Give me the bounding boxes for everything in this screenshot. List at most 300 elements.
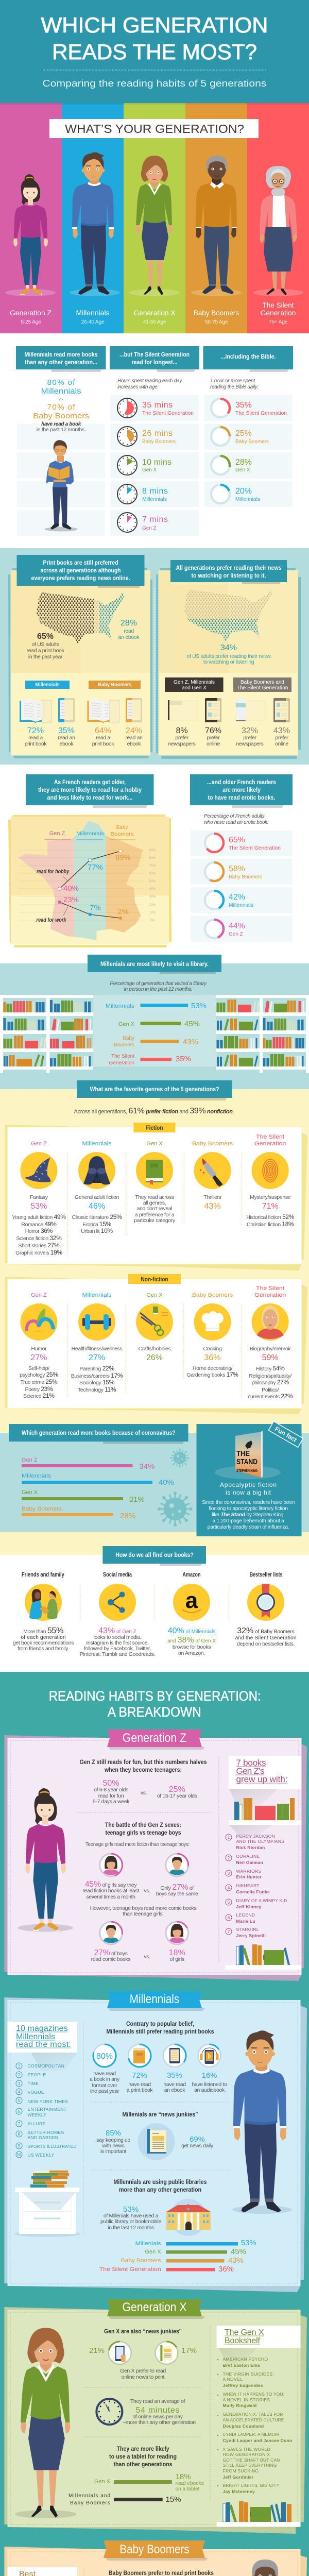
list: Gen Z books: Rick Riordan [236, 1845, 265, 1850]
text: battle of the sexes: The battle of the Gen Z sexes: [105, 1821, 181, 1828]
icon: print book 64 percent [88, 699, 119, 723]
label: Generation Z: 5-25 Age [21, 319, 41, 325]
label: Millennials tag: Millennials [35, 682, 60, 688]
heading: what's your generation [49, 119, 259, 138]
text: how books are found: More than 55% [23, 1626, 63, 1635]
text: how books are found: from friends and family. [18, 1646, 69, 1652]
bar chart: library visits [106, 1002, 207, 1066]
panel: five generation columns [0, 103, 309, 333]
ring: 28 percent: 28% [235, 458, 252, 467]
icon: bestseller badge [247, 1584, 284, 1621]
heading: print books preferred: across all generations although [40, 567, 121, 574]
list: Gen Z books: 4 [228, 1886, 230, 1890]
label: Generation X: 41-55 Age [143, 319, 166, 325]
ring: 28 percent [211, 456, 252, 474]
list: magazines: 8 [18, 2132, 21, 2137]
card: 10 magazines: Millennials [16, 2032, 55, 2041]
text: fiction stats: several times a month [86, 1894, 135, 1900]
list: magazines: 3 [18, 2081, 21, 2086]
label: Millennials tag [25, 681, 70, 689]
list: Gen X books: Jeffrey Eugenides [222, 2383, 263, 2388]
text: fiction stats: than teenage girls: [123, 1911, 164, 1917]
callout: fun fact apocalyptic fiction: Since the coronavirus, readers have been [202, 1499, 295, 1505]
panel: who reads most headers: ...but The Silent Generation [119, 351, 190, 358]
label: Millennials: Millennials [76, 309, 109, 317]
bar chart: coronavirus reading [22, 1457, 174, 1520]
text: tablet reading: than other generations [113, 2461, 173, 2468]
bar chart: tablet readers [68, 2472, 204, 2506]
label: The Silent Generation: Generation [261, 309, 296, 317]
card: 7 books Gen Z grew up with [229, 1756, 302, 1839]
label: Baby Boomers [194, 309, 239, 325]
icon: dark helmet [78, 1152, 115, 1189]
icon: book row on shelf [225, 1944, 302, 1970]
ring: 28 percent: Gen X [235, 467, 250, 473]
list: Gen X books: GENERATION X: TALES FOR [222, 2412, 283, 2417]
text: non-fiction genre stats: Humor [31, 1346, 47, 1352]
ring: 20 percent: 20% [235, 487, 252, 496]
text: public libraries: in the last 12 months [108, 2225, 154, 2231]
text: non-fiction genre stats: Religion/spirituality/ [249, 1373, 292, 1379]
list: magazines: AND GARDEN [28, 2135, 58, 2140]
chart: France map hobby and work lines: 77% [88, 863, 103, 872]
list: Gen X books: A NOVEL IN STORIES [222, 2397, 270, 2402]
icon: chef hat [194, 1303, 231, 1341]
text: non-fiction genre stats: Parenting 22% [79, 1365, 114, 1372]
text: non-fiction genre stats: 27% [30, 1353, 47, 1362]
text: how books are found [13, 1626, 297, 1657]
bar chart: public library use [99, 2239, 256, 2274]
bar chart: library visits: 35% [176, 1055, 191, 1063]
map: US adults prefer reading news [184, 589, 273, 642]
card: Gen X bookshelf: Bookshelf [225, 2336, 261, 2345]
text: fiction genre stats: Fantasy [30, 1194, 48, 1200]
bar chart: library visits: 43% [183, 1038, 198, 1046]
callout: fun fact apocalyptic fiction [197, 1421, 303, 1536]
text: non-fiction genre stats: Cooking [203, 1346, 222, 1352]
bar chart: public library use: The Silent Generation [99, 2266, 161, 2273]
card: 7 books Gen Z grew up with: grew up with: [236, 1774, 287, 1784]
stat row: book and news percentages: 32% [242, 726, 258, 735]
ring: 80 percent any format: format over [92, 2082, 117, 2089]
icon: Amazon logo [173, 1584, 210, 1621]
heading: French readers erotic books [190, 774, 293, 808]
panel: who reads most headers: than any other generation... [25, 359, 97, 366]
ring: 18 percent of girls read comics [166, 1922, 188, 1944]
card: 7 books Gen Z grew up with: Gen Z’s [236, 1766, 265, 1776]
list: Gen X books: FROM SUCKING [222, 2468, 259, 2473]
bar chart: coronavirus reading: 28% [120, 1512, 135, 1520]
ring: 16 percent audiobook [192, 2044, 227, 2093]
ribbon: Millennials [107, 1991, 205, 2011]
list: Gen X books: AN ACCELERATED CULTURE [222, 2417, 284, 2422]
bar chart: library visits: Generation [109, 1060, 134, 1066]
icon: ebook 35 percent [58, 698, 75, 722]
figure: large Millennial man [232, 2030, 292, 2214]
text: non-fiction genre stats: True crime 25% [20, 1378, 58, 1385]
panel: book reading comparison: 80% of [47, 378, 75, 387]
text: fiction stats: boys say the same [156, 1891, 198, 1897]
ring: 80 percent any format: have read [93, 2071, 116, 2077]
panel: coronavirus reading [0, 1424, 309, 1532]
ring: 16 percent audiobook: have listened to [192, 2081, 227, 2088]
panel: fiction genres: Gen Z [31, 1141, 47, 1147]
text: fiction genre stats: Historical fiction 52% [246, 1213, 295, 1221]
panel: print vs digital (open book spread) [0, 548, 309, 765]
list: Gen Z books: Marie Lu [236, 1919, 255, 1924]
chart: France map hobby and work lines: 2% [117, 907, 129, 916]
stat: 28 percent ebook: an ebook [118, 634, 140, 640]
clock: 10 mins: 10 mins [142, 458, 171, 467]
ring: 17 percent paper [155, 2342, 178, 2364]
text: public libraries: public library or bookmobile [100, 2218, 162, 2225]
icon: dumbbell [78, 1303, 115, 1341]
text: fiction genre stats: Science fiction 32% [16, 1234, 62, 1242]
text: non-fiction genre stats: 36% [204, 1353, 221, 1362]
list: Gen X books: Molly Ringwald [222, 2403, 257, 2408]
bar chart: tablet readers: 15% [166, 2495, 181, 2504]
stat row: book and news percentages: 35% [58, 726, 75, 735]
chart: France map hobby and work lines: Millennials [76, 831, 104, 837]
text: reading for fun halves [79, 1758, 207, 1805]
stat row: book and news percentages: print book [25, 741, 47, 747]
bar chart: library visits: 45% [184, 1020, 200, 1028]
chart: France map hobby and work lines [8, 815, 171, 947]
ring: 44 percent [205, 920, 245, 938]
chart: France map hobby and work lines: read for hobby [37, 869, 70, 875]
text: fiction genre stats: a preference for a [135, 1212, 175, 1218]
panel: Bible reading rings [204, 378, 293, 507]
list: Gen X books: BRIGHT LIGHTS, BIG CITY [222, 2483, 280, 2488]
text: fiction genre stats: 46% [89, 1202, 105, 1211]
panel: non-fiction genres [5, 1274, 307, 1414]
ribbon: Generation X: Generation X [123, 2300, 186, 2314]
ring: 35 percent: 35% [235, 401, 252, 410]
ring: 35 percent: The Silent Generation [235, 411, 287, 416]
clock: 35 mins: 35 mins [142, 401, 173, 410]
text: fiction genre stats: Classic literature 25% [72, 1213, 122, 1221]
text: news junkies: is important [100, 2148, 126, 2155]
text: reading for fun halves: 25% [169, 1785, 185, 1794]
panel: who reads most headers: read for longest... [132, 359, 177, 366]
icon: fingerprint [252, 1152, 289, 1189]
text: how books are found: looks to social media. [94, 1634, 141, 1640]
panel: fiction genres: Gen X [146, 1141, 163, 1147]
text: how books are found: followed by Facebook, Twitter, [84, 1646, 151, 1652]
label: Boomers and Silent tag: Baby Boomers and [241, 680, 284, 685]
panel: how we find books [0, 1546, 309, 1672]
text: public libraries [100, 2178, 207, 2231]
text: prefer print: Millennials still prefer reading print books [106, 2028, 214, 2035]
ring: 35 percent ebook [163, 2044, 186, 2093]
text: fiction genre stats: Christian fiction 18% [247, 1221, 294, 1228]
text: fiction genre stats: 53% [30, 1202, 47, 1211]
stat row: book and news percentages: 43% [273, 726, 290, 735]
bar chart: library visits: Baby [123, 1036, 134, 1041]
callout: fun fact apocalyptic fiction: is now a big hit [226, 1489, 271, 1496]
tab: Fiction [134, 1123, 175, 1132]
text: public libraries: Millennials are using public libraries [113, 2178, 207, 2185]
panel: who reads most headers: ...including the Bible. [220, 353, 276, 360]
ring: 35 percent ebook: 35% [167, 2071, 182, 2080]
title: reading habits breakdown: A BREAKDOWN [108, 1704, 201, 1720]
text: news junkies [96, 2111, 214, 2155]
chart: France map hobby and work lines: 40% [149, 887, 156, 891]
ring: 27 percent of boys read comics [100, 1922, 123, 1944]
text: how books are found: depend on bestseller lists. [237, 1641, 295, 1647]
figure: Generation X woman [129, 156, 180, 296]
heading: millennials visit library [88, 955, 221, 974]
stat: 65 percent print: 65% [37, 632, 54, 641]
panel: fiction genres [5, 1123, 307, 1270]
bar chart: coronavirus reading: 40% [159, 1478, 174, 1487]
bar chart: coronavirus reading: Baby Boomers [22, 1506, 62, 1512]
text: non-fiction genre stats: Technology 11% [78, 1386, 116, 1393]
text: Gen X news junkies: 17% [181, 2346, 197, 2355]
icon: newspaper 32 percent [236, 699, 265, 721]
stat: 34 percent prefer reading: to watching or listening [203, 659, 254, 665]
panel: book reading comparison [16, 378, 105, 536]
panel: who reads most headers [16, 346, 293, 372]
clock: 10 mins: Gen X [142, 467, 157, 473]
list: Gen Z books: Cornelia Funke [236, 1889, 270, 1894]
text: fiction genre stats: Young adult fiction 49% [12, 1213, 66, 1221]
bar chart: library visits: The Silent [111, 1054, 134, 1059]
text: comic stats: 18% [169, 1948, 185, 1957]
stat row: book and news percentages: prefer [207, 735, 220, 741]
text: how books are found: and 38% of Gen X [167, 1636, 216, 1645]
text: reading for fun halves: of 15-17 year olds [157, 1793, 197, 1799]
tab: Non-fiction [128, 1274, 181, 1284]
stat: 65 percent print: of US adults [32, 641, 59, 648]
bookshelf: right [218, 999, 303, 1066]
ring: 44 percent: 44% [229, 922, 245, 930]
figure: large Baby Boomer man [234, 2560, 296, 2576]
icon: tablet 76 percent [205, 698, 221, 722]
label: Gen Z Millennials Gen X tag: and Gen X [182, 685, 207, 691]
chart: France map hobby and work lines: Boomers [110, 832, 134, 837]
heading: favorite genres [77, 1080, 232, 1100]
ring: 20 percent: Millennials [235, 497, 260, 502]
panel: library visits with bookshelves [0, 955, 309, 1089]
line: read for work [58, 901, 122, 920]
bar chart: coronavirus reading: 31% [129, 1495, 145, 1504]
text: fiction genre stats: 43% [204, 1202, 221, 1211]
ring: 72 percent print book: have read [128, 2081, 151, 2088]
text: how books are found: 40% of Millennials [168, 1626, 215, 1635]
panel: how we find books: Friends and family [22, 1571, 64, 1578]
list: Gen Z books: INKHEART [236, 1883, 260, 1888]
clock: 8 mins [117, 484, 168, 504]
text: fiction stats: vs. [144, 1888, 150, 1894]
chart: France map hobby and work lines: 80% [149, 856, 156, 860]
stat: 34 percent prefer reading [187, 643, 271, 665]
icon: newspaper 8 percent [168, 700, 197, 720]
stat row: book and news percentages: print book [92, 741, 114, 747]
text: Gen X news junkies [89, 2328, 197, 2380]
text: how books are found: 32% of Baby Boomers [237, 1626, 295, 1635]
ring: 35 percent ebook: an ebook [164, 2087, 185, 2093]
text: non-fiction genre stats: Health/fitness/wellness [72, 1346, 122, 1352]
panel: book reading comparison: Millennials [41, 387, 81, 396]
figure: man reading a book [45, 440, 78, 532]
ring: 45 percent of girls read fiction [100, 1854, 123, 1876]
figure: large Generation Z girl [18, 1788, 73, 1932]
icon: social share [99, 1584, 136, 1621]
text: comic stats: 27% of boys [94, 1948, 128, 1957]
panel: Generation X [4, 2299, 307, 2534]
bar chart: public library use: 45% [231, 2247, 246, 2256]
text: news junkies: say keeping up [96, 2137, 130, 2143]
panel: erotic book rings: who have read an erotic book: [204, 820, 269, 825]
bar chart: coronavirus reading: Gen X [22, 1489, 38, 1496]
heading: what's your generation: WHAT’S YOUR GENERATION? [65, 122, 244, 135]
list: magazines: WEEKLY [28, 2112, 46, 2117]
heading: coronavirus: Which generation read more books because of coronavirus? [22, 1429, 175, 1436]
icon: scissors [136, 1303, 173, 1341]
chart: France map hobby and work lines: 60% [149, 872, 156, 875]
ring: 72 percent print book: 72% [132, 2071, 147, 2080]
clock: 10 mins [117, 455, 171, 475]
panel: non-fiction genres: Gen Z [31, 1292, 47, 1298]
panel: erotic book rings [191, 814, 293, 942]
panel: book reading comparison: vs. [58, 396, 64, 401]
ring: 58 percent: 58% [229, 865, 245, 873]
list: Gen X books: A NOVEL [222, 2377, 243, 2382]
clock: 7 mins: 7 mins [142, 515, 168, 524]
text: non-fiction genre stats: philosophy 27% [252, 1379, 289, 1386]
heading: French readers erotic books: to have read erotic books. [208, 794, 275, 801]
ring: 20 percent [211, 485, 260, 503]
ribbon: Generation X [107, 2299, 205, 2319]
panel: library visits with bookshelves: in person in the past 12 months: [124, 987, 193, 992]
icon: green book [136, 1152, 173, 1189]
heading: favorite genres: What are the favorite genres of the 5 generations? [90, 1086, 219, 1093]
text: tablet reading [109, 2445, 177, 2468]
stat row: book and news percentages: read a [28, 735, 43, 741]
panel: how we find books: Bestseller lists [250, 1571, 283, 1578]
list: Gen X books: STILL KEEP EVERYTHING [222, 2463, 277, 2468]
callout: fun fact apocalyptic fiction: flocking to apocalyptic literary fiction [209, 1505, 288, 1512]
ring: 58 percent [205, 862, 262, 881]
icon: library building [166, 2199, 211, 2236]
text: non-fiction genre stats: Gardening books 17% [186, 1371, 238, 1378]
stat row: book and news percentages: 24% [126, 726, 142, 735]
text: battle of the sexes: Teenage girls read more fiction than teenage boys: [85, 1841, 190, 1848]
list: Gen Z books: 1 [228, 1835, 230, 1840]
text: non-fiction genre stats: 26% [146, 1353, 163, 1362]
list: magazines: VOGUE [28, 2090, 44, 2095]
figure: Millennial man [70, 152, 120, 296]
chart: France map hobby and work lines: Baby [116, 825, 128, 831]
clock: 7 mins: Gen Z [142, 526, 157, 531]
bar chart: coronavirus reading: 34% [139, 1462, 155, 1471]
text: fiction genre stats: Mystery/suspense [250, 1194, 291, 1200]
label: Boomers and Silent tag [233, 677, 291, 692]
text: reading for fun halves: 50% [102, 1779, 119, 1788]
text: how books are found: of each generation [21, 1635, 66, 1640]
panel: time spent reading by generation: Hours spent reading each day [117, 378, 182, 384]
list: magazines [16, 2063, 77, 2158]
list: magazines: SPORTS ILLUSTRATED [28, 2144, 77, 2149]
panel: non-fiction genres: The Silent [256, 1285, 284, 1292]
ribbon: Generation Z: Generation Z [123, 1731, 186, 1745]
stat row: book and news percentages: read an [125, 735, 143, 741]
ring: 16 percent audiobook: 16% [201, 2071, 217, 2080]
stat row: book and news percentages: ebook [60, 741, 74, 747]
chart: France map hobby and work lines: 90% [149, 849, 156, 852]
text: fiction stats: 45% of girls say they [85, 1880, 137, 1889]
text: non-fiction genre stats: Politics/ [262, 1387, 279, 1393]
header banner [0, 0, 309, 103]
bar chart: tablet readers: on a tablet [176, 2486, 200, 2492]
list: Gen Z books: 2 [228, 1856, 230, 1860]
bar chart: library visits: 53% [191, 1002, 207, 1010]
heading: French readers erotic books: are more likely [222, 786, 261, 793]
chart: France map hobby and work lines: 70% [149, 864, 156, 868]
panel: library visits with bookshelves: Percentage of generation that visited a library [110, 981, 207, 987]
text: 54 minutes [123, 2398, 196, 2426]
callout: fun fact apocalyptic fiction: particularly deadly strain of influenza. [208, 1524, 289, 1530]
panel: non-fiction genres: Millennials [82, 1292, 112, 1298]
clock: 7 mins [117, 513, 168, 532]
panel: non-fiction genres: Generation [254, 1292, 286, 1298]
text: reading for fun halves: when they become teenagers: [104, 1766, 182, 1773]
text: Gen X news junkies: 21% [89, 2346, 105, 2355]
ring: 21 percent phone [109, 2342, 131, 2364]
panel: Bible reading rings: reading the Bible daily: [210, 384, 259, 390]
figure: Baby Boomer man [191, 156, 242, 296]
bar chart: public library use: Gen X [145, 2249, 161, 2255]
bar chart: public library use: 53% [241, 2239, 256, 2247]
title: reading habits breakdown: READING HABITS BY GENERATION: [49, 1688, 261, 1704]
line: read for hobby [58, 850, 122, 890]
list: magazines: BETTER HOMES [28, 2130, 64, 2135]
ring: 25 percent [211, 427, 269, 446]
text: how books are found: get book recommendations [13, 1640, 74, 1646]
figure: Silent Generation woman [253, 166, 303, 296]
text: how books are found: on Amazon. [178, 1650, 205, 1656]
stat row: book and news percentages: prefer [175, 735, 189, 741]
heading: French readers hobby vs work: they are more likely to read for a hobby [38, 786, 142, 793]
panel: time spent reading by generation [110, 378, 199, 536]
list: Gen Z books: LEGEND [236, 1912, 255, 1918]
list: Gen Z books: Erin Hunter [236, 1874, 262, 1879]
clock: 8 mins: 8 mins [142, 487, 168, 496]
label: Gen Z Millennials Gen X tag [165, 677, 224, 692]
heading: prefer reading news: All generations prefer reading their news [176, 564, 282, 571]
stat row: book and news percentages: newspapers [168, 741, 196, 747]
label: Boomers and Silent tag: The Silent Generation [237, 685, 288, 691]
panel: book reading comparison: 70% of [47, 403, 75, 412]
list: Gen Z books: WARRIORS [236, 1869, 261, 1874]
chart: France map hobby and work lines: 7% [90, 904, 101, 912]
text: comic stats [91, 1948, 185, 1962]
label: Gen Z Millennials Gen X tag: Gen Z, Millennials [174, 680, 215, 685]
ring: 80 percent any format [90, 2044, 120, 2094]
list: Gen Z books: 6 [228, 1916, 230, 1920]
chart: France map hobby and work lines: 40% [63, 884, 79, 893]
subtitle: Comparing the reading habits of 5 generations [42, 78, 267, 89]
panel: non-fiction genres: Gen X [146, 1292, 163, 1298]
text: how books are found: and the Silent Generation [235, 1635, 297, 1641]
text: 54 minutes: of online news per day [132, 2414, 183, 2420]
text: fiction stats: Only 27% of [161, 1883, 194, 1892]
heading: millennials visit library: Millenials are most likely to visit a library. [100, 960, 209, 968]
stat: 28 percent ebook: read [124, 628, 134, 634]
list: Gen X books: Douglas Coupland [222, 2424, 264, 2429]
text: 54 minutes: –more than any other generation [123, 2419, 196, 2426]
